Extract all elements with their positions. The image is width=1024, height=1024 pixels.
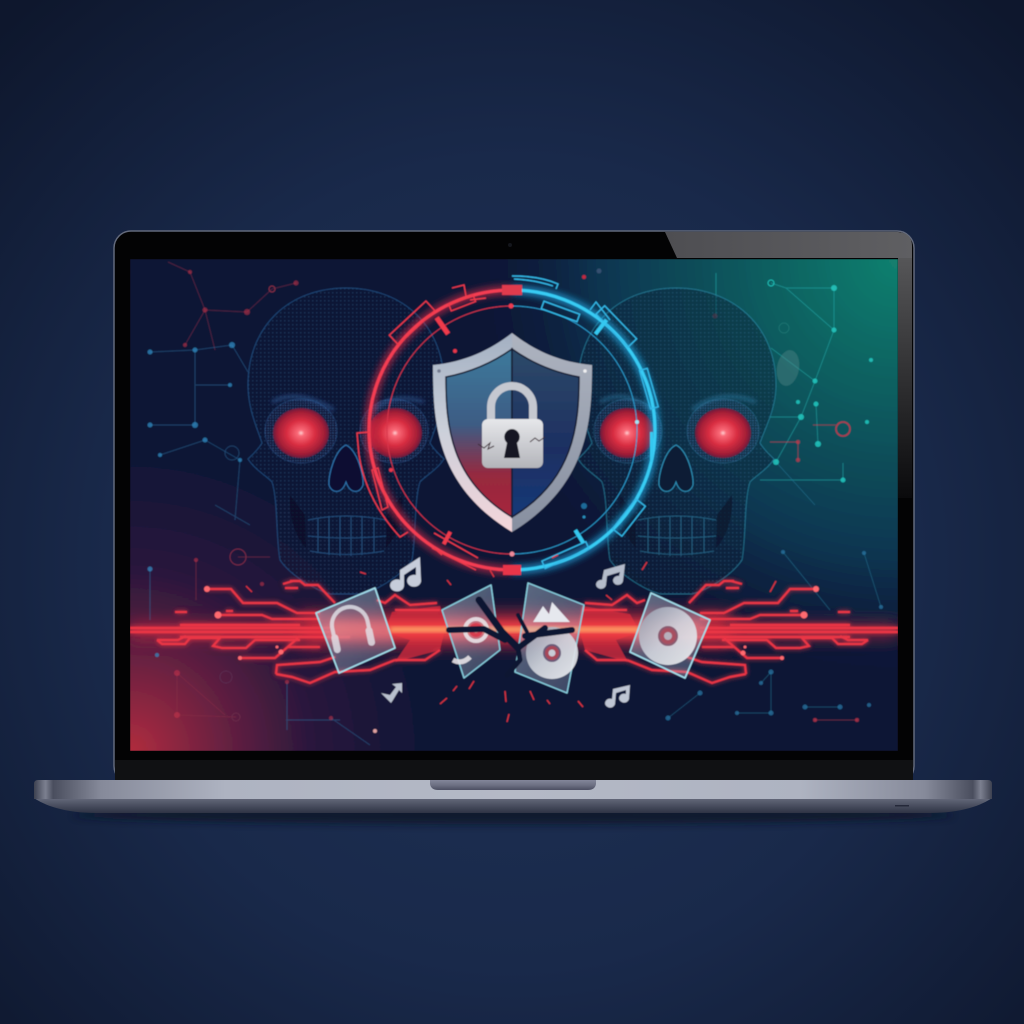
inner blue arc <box>512 306 637 554</box>
laptop lid <box>114 231 914 783</box>
skull left nose <box>329 445 363 491</box>
headphones icon <box>326 603 376 654</box>
target icon <box>453 619 487 662</box>
circuit central red mass: right <box>578 606 640 662</box>
crack lines <box>449 600 572 675</box>
media card: disc (broken) <box>515 583 584 693</box>
blue HUD segments <box>512 276 658 568</box>
shield inner right <box>512 349 579 517</box>
screen background <box>130 259 898 751</box>
laptop <box>34 231 992 824</box>
CD icon <box>639 607 697 665</box>
shield inner left <box>446 349 512 517</box>
shield <box>433 333 592 532</box>
network nodes: right <box>668 273 881 720</box>
skull right outline <box>578 288 776 594</box>
skull right mouth shadow <box>620 495 732 548</box>
outer blue arc <box>512 290 655 570</box>
skull left teeth <box>308 516 386 556</box>
circular HUD ring <box>357 268 658 575</box>
lock cracks <box>478 437 545 449</box>
inner red arc <box>387 306 512 554</box>
skull left glowing eyes <box>273 408 329 458</box>
red HUD segments <box>357 285 486 570</box>
circuit traces: right <box>582 581 898 683</box>
media card: CD <box>630 593 710 678</box>
skull right brow highlight <box>600 397 756 410</box>
keyhole <box>504 429 520 458</box>
circuit central flare <box>330 622 700 638</box>
skull right glowing eyes <box>600 408 654 458</box>
skull right teeth <box>638 516 716 556</box>
circuit central red mass: left <box>385 606 446 662</box>
padlock shackle <box>491 386 533 422</box>
shield outer frame left <box>433 333 512 532</box>
base lower edge <box>34 798 992 813</box>
debris sparks <box>246 555 776 722</box>
skull right nose <box>659 445 693 491</box>
skull left sockets <box>265 399 428 463</box>
circuit traces: left <box>130 581 440 683</box>
arrow fragment <box>381 683 402 703</box>
base top deck <box>34 780 992 799</box>
music note: large <box>390 557 421 591</box>
skull left outline <box>248 288 444 594</box>
red ticks <box>435 316 450 335</box>
laptop shadow <box>73 806 953 824</box>
music note: upper right <box>596 564 625 589</box>
skull: right <box>578 288 776 594</box>
network nodes: left <box>150 262 370 745</box>
skull: left <box>248 288 444 594</box>
disc icon <box>526 627 578 679</box>
media card: headphones <box>316 588 395 673</box>
ring nodes <box>508 304 514 308</box>
skull left brow highlight <box>272 397 424 410</box>
padlock <box>478 386 545 468</box>
skull left mouth shadow <box>290 495 402 548</box>
circuit glow band <box>130 612 898 646</box>
image fragment icon <box>533 602 570 622</box>
blue ticks <box>594 319 608 335</box>
outer red arc <box>369 290 512 570</box>
ring glow <box>369 290 512 570</box>
decorative pale blob <box>776 350 800 386</box>
circuit terminals <box>204 586 819 660</box>
port slot <box>895 805 909 806</box>
padlock body <box>482 419 543 468</box>
trackpad notch <box>430 780 596 790</box>
music note: lower right <box>605 685 630 708</box>
laptop screen <box>130 259 898 751</box>
shield outer frame right <box>512 333 592 532</box>
media card: target (broken) <box>442 585 500 678</box>
skull right sockets <box>594 399 759 463</box>
laptop base <box>34 780 992 813</box>
ring marker squares <box>502 285 522 295</box>
